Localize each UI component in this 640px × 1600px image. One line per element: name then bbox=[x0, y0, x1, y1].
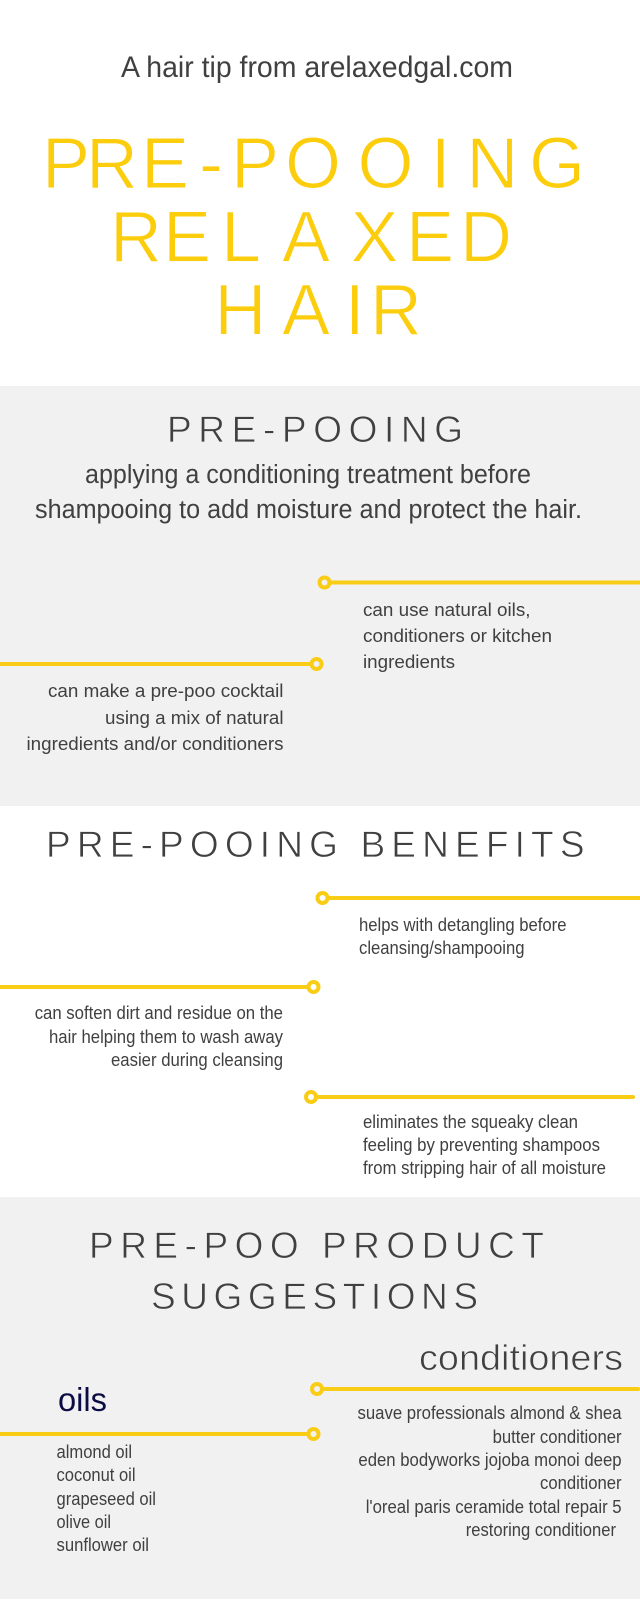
callout: squeaky clean: feeling by preventing shampoos bbox=[363, 1135, 600, 1155]
panel: benefits bbox=[0, 824, 640, 1178]
conditioners label: conditioners bbox=[419, 1337, 623, 1378]
subtitle: A hair tip from arelaxedgal.com bbox=[121, 51, 513, 84]
callout: conditioners list: restoring conditioner bbox=[466, 1520, 616, 1540]
title: RELAXED bbox=[110, 198, 512, 278]
callout: detangling: helps with detangling before bbox=[359, 915, 566, 935]
title: HAIR bbox=[214, 270, 422, 350]
callout: oils list bbox=[0, 1429, 318, 1555]
callout: oils list: coconut oil bbox=[56, 1465, 136, 1485]
callout: oils list: grapeseed oil bbox=[56, 1489, 156, 1509]
callout: pre-poo cocktail: can make a pre-poo cocktail bbox=[48, 681, 284, 701]
oils label: oils bbox=[58, 1381, 107, 1418]
callout: pre-poo cocktail: ingredients and/or conditioners bbox=[26, 734, 284, 754]
callout: pre-poo cocktail: using a mix of natural bbox=[105, 708, 284, 728]
callout: squeaky clean bbox=[306, 1092, 633, 1178]
title bbox=[42, 124, 585, 350]
callout: soften dirt bbox=[0, 982, 318, 1070]
callout: squeaky clean: eliminates the squeaky clean bbox=[363, 1112, 578, 1132]
callout: conditioners list: butter conditioner bbox=[493, 1427, 622, 1447]
definition text: applying a conditioning treatment before bbox=[85, 461, 531, 489]
callout: conditioners list bbox=[312, 1384, 638, 1540]
callout: pre-poo cocktail bbox=[0, 659, 322, 754]
callout: conditioners list: conditioner bbox=[540, 1473, 622, 1493]
callout: oils list: almond oil bbox=[56, 1442, 132, 1462]
heading: product suggestions: PRE-POO PRODUCT bbox=[89, 1225, 544, 1266]
callout: natural oils: ingredients bbox=[363, 652, 455, 672]
panel: product suggestions bbox=[0, 1225, 638, 1555]
callout: conditioners list: eden bodyworks jojoba monoi deep bbox=[358, 1450, 622, 1470]
callout: soften dirt: hair helping them to wash away bbox=[49, 1027, 283, 1047]
heading: pre-pooing: PRE-POOING bbox=[167, 409, 463, 450]
callout: detangling: cleansing/shampooing bbox=[359, 938, 524, 958]
callout: natural oils: can use natural oils, bbox=[363, 600, 530, 620]
callout: detangling bbox=[318, 893, 640, 958]
callout: conditioners list: suave professionals almond & shea bbox=[358, 1403, 622, 1423]
definition text: shampooing to add moisture and protect the hair. bbox=[35, 496, 582, 524]
panel: pre-pooing definition bbox=[0, 409, 640, 754]
heading: product suggestions: SUGGESTIONS bbox=[151, 1276, 478, 1317]
callout: soften dirt: easier during cleansing bbox=[111, 1050, 283, 1070]
title: PRE-POOING bbox=[42, 124, 585, 204]
heading: product suggestions bbox=[89, 1225, 544, 1317]
heading: benefits: PRE-POOING BENEFITS bbox=[46, 824, 584, 865]
callout: oils list: olive oil bbox=[56, 1512, 111, 1532]
callout: squeaky clean: from stripping hair of all moisture bbox=[363, 1158, 606, 1178]
definition text bbox=[35, 461, 582, 524]
callout: oils list: sunflower oil bbox=[56, 1535, 149, 1555]
callout: natural oils: conditioners or kitchen bbox=[363, 626, 552, 646]
callout: natural oils bbox=[320, 578, 640, 672]
callout: conditioners list: l'oreal paris ceramide total repair 5 bbox=[366, 1497, 622, 1517]
callout: soften dirt: can soften dirt and residue on the bbox=[35, 1003, 283, 1023]
